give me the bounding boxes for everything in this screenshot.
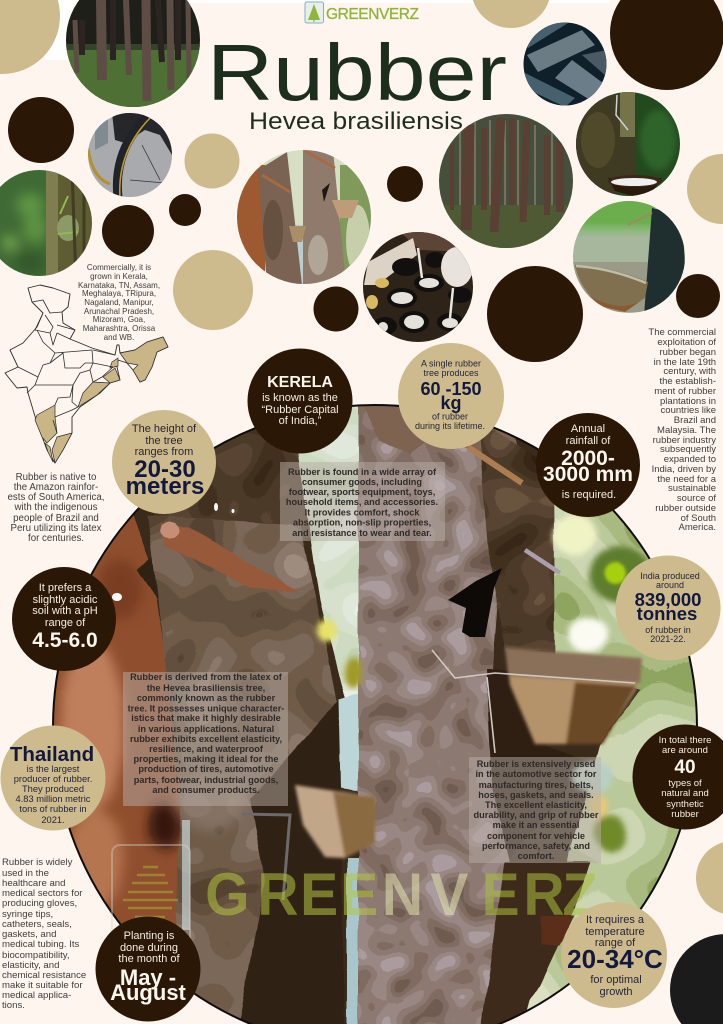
callout: Thailand: They produced <box>22 784 84 794</box>
text: medical uses: producing gloves, <box>2 898 77 909</box>
text: commercial exploitation history: expanded to <box>664 454 716 465</box>
callout: Kerala <box>248 348 352 454</box>
panel: automotive uses: manufacturing tires, belts, <box>479 780 593 790</box>
text: commercial exploitation history: of South <box>681 513 716 524</box>
illustration: dark lower trunk <box>238 700 345 1024</box>
panel: consumer goods: and resistance to wear and tear. <box>292 528 432 538</box>
illustration: pale highlight on mottled trunk <box>175 770 245 830</box>
text: commercial exploitation history: sustainable <box>668 483 716 494</box>
panel: what rubber is: the Hevea brasiliensis tree, <box>147 683 265 693</box>
text: native origin: with the indigenous <box>14 502 98 513</box>
callout: planting season <box>96 916 200 1022</box>
watermark logo: GREE <box>205 862 378 928</box>
text: where grown commercially: Mizoram, Goa, <box>93 315 145 324</box>
callout: tree height: ranges from <box>135 446 193 458</box>
callout: soil pH <box>12 567 116 671</box>
watermark logo <box>112 845 597 955</box>
text: commercial exploitation history: plantations in <box>660 396 716 407</box>
illustration: lower dark bark <box>480 862 590 1024</box>
photo: stacked tires <box>524 22 606 106</box>
panel: automotive uses: make it an essential <box>493 820 579 830</box>
panel: what rubber is: resilience, and waterproof <box>149 744 264 754</box>
text: where grown commercially: Karnataka, TN, Assam, <box>78 281 160 290</box>
text: commercial exploitation history: countries like <box>661 405 716 416</box>
callout: India production: 2021-22. <box>650 634 686 644</box>
illustration: dark right trunk <box>480 429 556 650</box>
panel: automotive uses: The excellent elasticity, <box>485 800 587 810</box>
illustration: left orange bark <box>54 515 180 925</box>
panel: what rubber is: rubber exhibits excellent elasticity, <box>130 734 282 744</box>
illustration: white column <box>182 820 190 930</box>
callout: temperature: It requires a <box>586 914 645 926</box>
callout: yield per tree: of rubber <box>432 412 468 422</box>
text: native origin: Peru utilizing its latex <box>10 523 102 534</box>
callout: types of rubber <box>632 724 723 830</box>
callout: Thailand: 2021. <box>41 815 65 825</box>
text: medical uses: medical applica- <box>2 990 71 1001</box>
watermark: frame <box>112 845 190 955</box>
callout: tree height: 20-30 <box>134 456 196 483</box>
panel: what rubber is: and consumer products. <box>152 785 260 795</box>
illustration: blue gap bottom <box>346 858 359 1024</box>
panel: consumer goods: footwear, sports equipment, toys, <box>289 487 435 497</box>
callout: Thailand: tons of rubber in <box>19 804 87 814</box>
callout: soil pH: range of <box>45 617 86 629</box>
text: commercial exploitation history: subsequently <box>660 444 716 455</box>
callout: planting season: the month of <box>118 953 181 965</box>
watermark logo: ERZ <box>482 862 597 928</box>
panel: consumer goods: consumer goods, including <box>302 477 422 487</box>
panel: automotive uses: performance, safety, and <box>482 841 590 851</box>
callout: Thailand: is the largest <box>27 764 80 774</box>
callout: rainfall <box>536 413 640 517</box>
callout: temperature: growth <box>599 986 633 998</box>
photo: wooden bowl beside trunk <box>570 198 688 316</box>
text: medical uses: Rubber is widely <box>2 857 73 868</box>
callout: tree height: the tree <box>145 435 183 447</box>
illustration: white marks <box>112 503 234 601</box>
text: commercial exploitation history: exploitation of <box>657 337 716 348</box>
map: highlighted states <box>35 337 168 463</box>
callout: India production: India produced <box>640 571 700 581</box>
text: commercial exploitation history: Brazil and <box>674 415 716 426</box>
illustration: wire <box>432 650 635 753</box>
callout: temperature <box>561 902 667 1008</box>
callout: Kerala: is known as the <box>262 392 338 404</box>
text: where grown commercially <box>78 263 160 342</box>
callout: types of rubber: types of <box>668 778 702 789</box>
callout: Kerala: of India,” <box>279 415 322 427</box>
callout: soil pH: 4.5-6.0 <box>32 629 98 652</box>
panel: what rubber is: Rubber is derived from the latex of <box>130 672 283 682</box>
illustration: foliage highlights <box>317 515 650 851</box>
panel: automotive uses: comfort. <box>518 851 554 861</box>
text: commercial exploitation history: source of <box>677 493 716 504</box>
text: medical uses: chemical resistance <box>2 970 86 981</box>
callout: types of rubber: rubber <box>671 809 699 820</box>
callout: types of rubber: In total there <box>659 735 711 746</box>
callout: India production <box>616 556 720 660</box>
panel: consumer goods <box>280 462 445 541</box>
callout: tree height: The height of <box>132 423 197 435</box>
illustration: black sap mark <box>448 568 502 637</box>
illustration: lime spot <box>604 562 626 584</box>
text: medical uses: healthcare and <box>2 878 65 889</box>
callout: yield per tree <box>398 343 504 449</box>
callout: rainfall: is required. <box>562 489 616 501</box>
text: medical uses: medical tubing. Its <box>2 939 80 950</box>
callout: rainfall: Annual <box>571 423 605 435</box>
text: commercial exploitation history: century, with <box>663 366 716 377</box>
callout: types of rubber: natural and <box>661 788 709 799</box>
logo: GREENVERZ <box>326 6 419 23</box>
callout: types of rubber: synthetic <box>666 799 704 810</box>
text: medical uses: used in the <box>2 868 49 879</box>
illustration: small cup <box>295 785 375 858</box>
callout: temperature: for optimal <box>590 974 642 986</box>
title: Rubber <box>207 28 507 117</box>
illustration: right foliage <box>526 504 696 1010</box>
panel: automotive uses: in the automotive sector for <box>476 769 597 779</box>
callout: India production: tonnes <box>637 603 697 624</box>
callout: soil pH: slightly acidic <box>33 594 98 606</box>
text: where grown commercially: Meghalaya, TRipura, <box>82 289 156 298</box>
callout: temperature: 20-34°C <box>567 944 663 974</box>
text: medical uses: gaskets, and <box>2 929 56 940</box>
illustration: central bark <box>358 400 510 1024</box>
watermark logo: NV <box>382 862 468 928</box>
callout: Thailand <box>0 726 106 830</box>
text: where grown commercially: Nagaland, Manipur, <box>84 298 154 307</box>
text: commercial exploitation history <box>648 327 717 533</box>
callout: Thailand: 4.83 million metric <box>16 794 91 804</box>
illustration: under cup dark <box>486 669 574 860</box>
callout: planting season: August <box>110 980 187 1005</box>
text: commercial exploitation history: rubber outside <box>655 503 716 514</box>
text: medical uses: catheters, seals, <box>2 919 72 930</box>
text: where grown commercially: Arunachal Pradesh, <box>84 307 154 316</box>
text: medical uses: elasticity, and <box>2 960 59 971</box>
callout: types of rubber: 40 <box>674 757 696 778</box>
subtitle: Hevea brasiliensis <box>249 108 463 135</box>
logo <box>305 2 419 23</box>
illustration: tapping spout <box>525 550 560 573</box>
panel: consumer goods: It provides comfort, shock <box>305 508 420 518</box>
illustration: dark notch <box>137 557 157 600</box>
text: native origin: Rubber is native to <box>16 472 96 483</box>
text: medical uses: medical sectors for <box>2 888 83 899</box>
illustration: top bark band <box>364 406 518 454</box>
panel: what rubber is: production of tires, automotive <box>138 764 274 774</box>
text: commercial exploitation history: rubber industry <box>653 435 716 446</box>
callout: yield per tree: tree produces <box>423 368 479 378</box>
panel: what rubber is <box>123 672 288 806</box>
callout: planting season: done during <box>120 942 178 954</box>
icon: logo tree <box>305 2 324 23</box>
illustration: lighter left shading <box>60 560 181 910</box>
illustration: upper dark trunk <box>158 433 311 539</box>
panel: what rubber is: commonly known as the rubber <box>137 693 276 703</box>
callout: planting season: May - <box>120 965 176 990</box>
text: where grown commercially: Commercially, it is <box>87 263 151 272</box>
illustration: red brown patch <box>541 917 575 945</box>
photo: latex cup on trunk <box>576 92 680 196</box>
panel: consumer goods: absorption, non-slip properties, <box>293 518 431 528</box>
panel: consumer goods: household items, and accessories. <box>286 497 438 507</box>
text: commercial exploitation history: Malaysia. The <box>657 425 716 436</box>
illustration outline <box>53 405 697 1024</box>
callout: India production: of rubber in <box>645 625 691 635</box>
panel: automotive uses: Rubber is extensively used <box>477 759 595 769</box>
text: native origin: the Amazon rainfor- <box>14 482 98 493</box>
illustration: spout under small cup <box>242 814 290 900</box>
photo: bicycle wheel <box>88 113 172 197</box>
panel: what rubber is: properties, making it ideal for the <box>134 754 278 764</box>
text: commercial exploitation history: America. <box>679 522 716 533</box>
panel: automotive uses: component for vehicle <box>487 831 585 841</box>
callout: soil pH: It prefers a <box>39 582 92 594</box>
photo: tapped rubber trees <box>235 148 375 288</box>
text: native origin: people of Brazil and <box>13 513 99 524</box>
text: commercial exploitation history: rubber began <box>659 347 716 358</box>
panel: consumer goods: Rubber is found in a wide array of <box>288 467 437 477</box>
callout: yield per tree: kg <box>440 393 462 413</box>
callout: rainfall: 3000 mm <box>543 463 633 486</box>
text: commercial exploitation history: the need for a <box>657 474 717 485</box>
text: medical uses: tions. <box>2 1000 25 1011</box>
text: native origin: ests of South America, <box>8 492 104 503</box>
text: commercial exploitation history: India, driven by <box>652 464 716 475</box>
callout: soil pH: soil with a pH <box>32 605 98 617</box>
callout: rainfall: 2000- <box>561 447 615 470</box>
callout: temperature: range of <box>595 937 636 949</box>
photo: latex in bowls <box>360 230 476 345</box>
photo: moss on trunk <box>0 168 96 280</box>
callout: planting season: Planting is <box>124 930 175 942</box>
panel: automotive uses: hoses, gaskets, and seals. <box>478 790 594 800</box>
text: native origin: for centuries. <box>28 533 84 544</box>
text: where grown commercially: and WB. <box>104 333 134 342</box>
illustration: pale gap <box>298 406 360 698</box>
callout: India production: 839,000 <box>635 589 701 610</box>
illustration: pink streak start <box>160 522 180 538</box>
big circular tree illustration <box>40 395 715 1024</box>
callout: Thailand: Thailand <box>10 743 94 766</box>
callout: Kerala: KERELA <box>267 374 333 391</box>
callout: temperature: temperature <box>585 926 645 938</box>
panel: what rubber is: tree. It possesses unique character- <box>128 704 284 714</box>
text: commercial exploitation history: the establish- <box>659 376 716 387</box>
panel: what rubber is: parts, footwear, industrial goods, <box>134 775 278 785</box>
illustration: mottled trunk <box>148 515 338 1024</box>
text: medical uses: biocompatibility, <box>2 950 70 961</box>
panel: automotive uses <box>469 757 601 863</box>
text: commercial exploitation history: The commercial <box>648 327 716 338</box>
callout: yield per tree: A single rubber <box>421 358 481 368</box>
callout: India production: around <box>656 580 684 590</box>
panel: what rubber is: in various applications. Natural <box>138 724 274 734</box>
panel: what rubber is: istics that make it highly desirable <box>131 713 281 723</box>
text: native origin <box>8 472 104 544</box>
illustration: orange streak <box>160 524 298 592</box>
callout: yield per tree: 60 -150 <box>420 379 482 399</box>
text: medical uses <box>2 857 86 1011</box>
text: medical uses: make it suitable for <box>2 980 83 991</box>
callout: Kerala: “Rubber Capital <box>261 404 339 416</box>
illustration: large cup <box>505 648 642 744</box>
callout: Thailand: producer of rubber. <box>14 774 92 784</box>
callout: tree height <box>112 410 216 514</box>
panel: automotive uses: durability, and grip of rubber <box>474 810 599 820</box>
map of India <box>5 285 168 463</box>
text: where grown commercially: grown in Kerala, <box>90 272 148 281</box>
callout: rainfall: rainfall of <box>566 435 611 447</box>
text: commercial exploitation history: ment of rubber <box>654 386 716 397</box>
illustration: orange bark stripe <box>468 447 522 483</box>
callout: tree height: meters <box>126 473 204 500</box>
callout: types of rubber: are around <box>662 745 708 756</box>
illustration: blue gap lower <box>338 693 359 791</box>
callout: yield per tree: during its lifetime. <box>415 421 485 431</box>
photo: forest floor top left <box>66 0 200 107</box>
watermark: tree stripes <box>123 867 178 917</box>
text: medical uses: syringe tips, <box>2 909 53 920</box>
text: where grown commercially: Maharashtra, Orissa <box>83 324 156 333</box>
photo: rubber plantation <box>439 114 573 248</box>
text: commercial exploitation history: in the late 19th <box>654 357 716 368</box>
